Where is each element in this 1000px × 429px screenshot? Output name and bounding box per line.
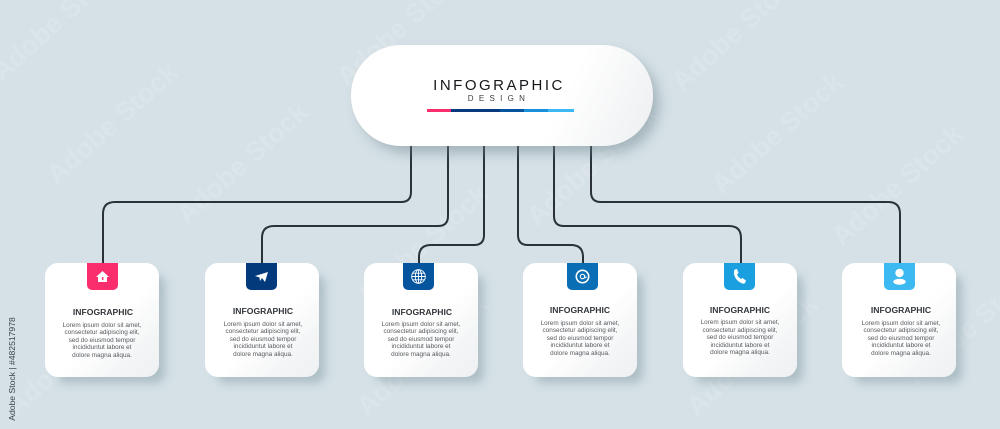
heading: INFOGRAPHIC	[550, 305, 610, 315]
stock id caption: Adobe Stock | #482517978	[7, 317, 17, 421]
panel: card 6	[842, 263, 956, 377]
heading: INFOGRAPHIC	[710, 304, 770, 314]
icon: user	[884, 263, 915, 290]
text block: sed do eiusmod tempor	[230, 336, 296, 342]
heading: INFOGRAPHIC	[73, 307, 133, 317]
text block	[224, 320, 302, 358]
text block: Lorem ipsum dolor sit amet,	[63, 322, 141, 328]
icon: home	[87, 263, 118, 290]
colour bar	[427, 109, 574, 112]
icon: phone	[724, 263, 755, 290]
watermark pattern: Adobe Stock	[351, 179, 494, 311]
text block: sed do eiusmod tempor	[69, 336, 135, 344]
text block	[701, 319, 779, 356]
text block: dolore magna aliqua.	[710, 349, 770, 356]
icon: at sign	[567, 263, 598, 290]
text block: Lorem ipsum dolor sit amet,	[382, 320, 460, 328]
watermark pattern: Adobe Stock	[41, 57, 184, 189]
panel: card 4	[523, 263, 637, 377]
watermark pattern: Adobe Stock	[351, 289, 494, 421]
watermark pattern: Adobe Stock	[706, 67, 849, 199]
text block: Lorem ipsum dolor sit amet,	[701, 319, 779, 326]
watermark pattern: Adobe Stock	[171, 97, 314, 229]
text block	[63, 322, 141, 358]
text block: sed do eiusmod tempor	[868, 334, 934, 342]
text block	[541, 320, 619, 356]
heading: INFOGRAPHIC	[233, 306, 293, 316]
text block: incididuntut labore et	[392, 343, 450, 350]
text block	[862, 320, 940, 356]
heading: INFOGRAPHIC	[871, 305, 931, 315]
text block: incididuntut labore et	[550, 342, 609, 349]
text block: consectetur adipiscing elit,	[543, 327, 617, 334]
text block: sed do eiusmod tempor	[707, 334, 773, 341]
text block: consectetur adipiscing elit,	[384, 328, 458, 335]
heading: INFOGRAPHIC	[392, 306, 452, 316]
text block: incididuntut labore et	[234, 343, 292, 350]
panel: card 2	[205, 263, 319, 377]
text block: consectetur adipiscing elit,	[864, 327, 938, 334]
text block: dolore magna aliqua.	[391, 350, 451, 358]
text block: Lorem ipsum dolor sit amet,	[224, 320, 302, 328]
icon: globe	[403, 263, 434, 290]
text block: consectetur adipiscing elit,	[65, 329, 139, 336]
text block: consectetur adipiscing elit,	[226, 328, 300, 335]
text block: dolore magna aliqua.	[550, 350, 610, 356]
text block: dolore magna aliqua.	[233, 350, 293, 358]
text block: sed do eiusmod tempor	[388, 336, 454, 342]
central title pill	[351, 45, 653, 146]
watermark pattern: Adobe Stock	[826, 119, 969, 251]
text block: incididuntut labore et	[872, 342, 930, 349]
subtitle: DESIGN	[468, 94, 530, 103]
text block: Lorem ipsum dolor sit amet,	[862, 320, 940, 326]
text block: sed do eiusmod tempor	[547, 334, 613, 342]
text block: incididuntut labore et	[710, 342, 769, 348]
text block: Lorem ipsum dolor sit amet,	[541, 320, 619, 326]
text block: incididuntut labore et	[72, 344, 131, 351]
text block	[382, 320, 460, 358]
text block: dolore magna aliqua.	[871, 350, 931, 356]
watermark pattern: Adobe Stock	[1, 289, 144, 421]
panel: card 1	[45, 263, 159, 377]
watermark pattern: Adobe Stock	[521, 99, 664, 231]
watermark pattern: Adobe Stock	[681, 289, 824, 421]
panel: card 5	[683, 263, 797, 377]
text block: dolore magna aliqua.	[72, 352, 132, 358]
icon: paper plane	[246, 263, 277, 290]
panel: card 3	[364, 263, 478, 377]
text block: consectetur adipiscing elit,	[703, 326, 777, 334]
title: INFOGRAPHIC	[433, 76, 565, 94]
